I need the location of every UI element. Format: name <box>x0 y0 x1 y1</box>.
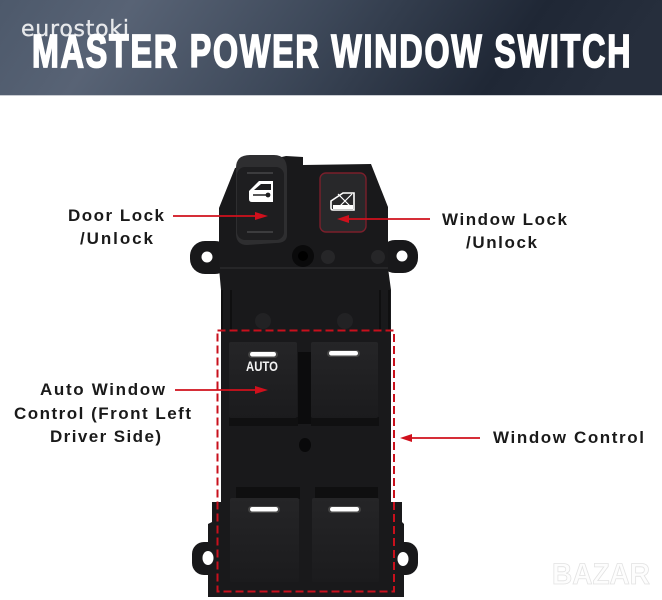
window lock button <box>320 173 366 232</box>
arrow: window lock <box>337 215 430 223</box>
door lock button <box>236 155 287 245</box>
label: auto window control: Driver Side) <box>50 427 161 446</box>
label: auto window control: Control (Front Left <box>14 404 191 423</box>
auto window button (front left) <box>229 342 298 426</box>
rear right window button <box>312 487 379 582</box>
label: window control: Window Control <box>493 428 644 447</box>
switch body housing <box>190 156 418 597</box>
label: window lock/unlock: /Unlock <box>466 233 538 252</box>
label: auto window control: Auto Window <box>40 380 166 399</box>
watermark: eurostoki: eurostoki <box>21 17 129 42</box>
header banner <box>0 0 662 96</box>
arrow: auto window <box>175 386 268 394</box>
icon: window crossed out <box>331 193 354 210</box>
label: window lock/unlock <box>442 210 568 252</box>
label: door lock/unlock <box>68 206 165 248</box>
window control dashed frame <box>218 330 394 592</box>
rear left window button <box>230 487 300 582</box>
label: door lock/unlock: Door Lock <box>68 206 165 225</box>
arrow: door lock <box>173 212 268 220</box>
watermark: bazar: BAZAR <box>552 558 650 591</box>
window switch unit <box>190 155 418 597</box>
arrow: window control <box>400 434 480 442</box>
title: MASTER POWER WINDOW SWITCH <box>32 26 630 77</box>
label: auto window control <box>14 380 191 446</box>
label: door lock/unlock: /Unlock <box>80 229 154 248</box>
icon: door with key <box>249 181 273 202</box>
AUTO label: AUTO <box>246 358 278 374</box>
label: window lock/unlock: Window Lock <box>442 210 568 229</box>
front right window button <box>311 342 379 426</box>
